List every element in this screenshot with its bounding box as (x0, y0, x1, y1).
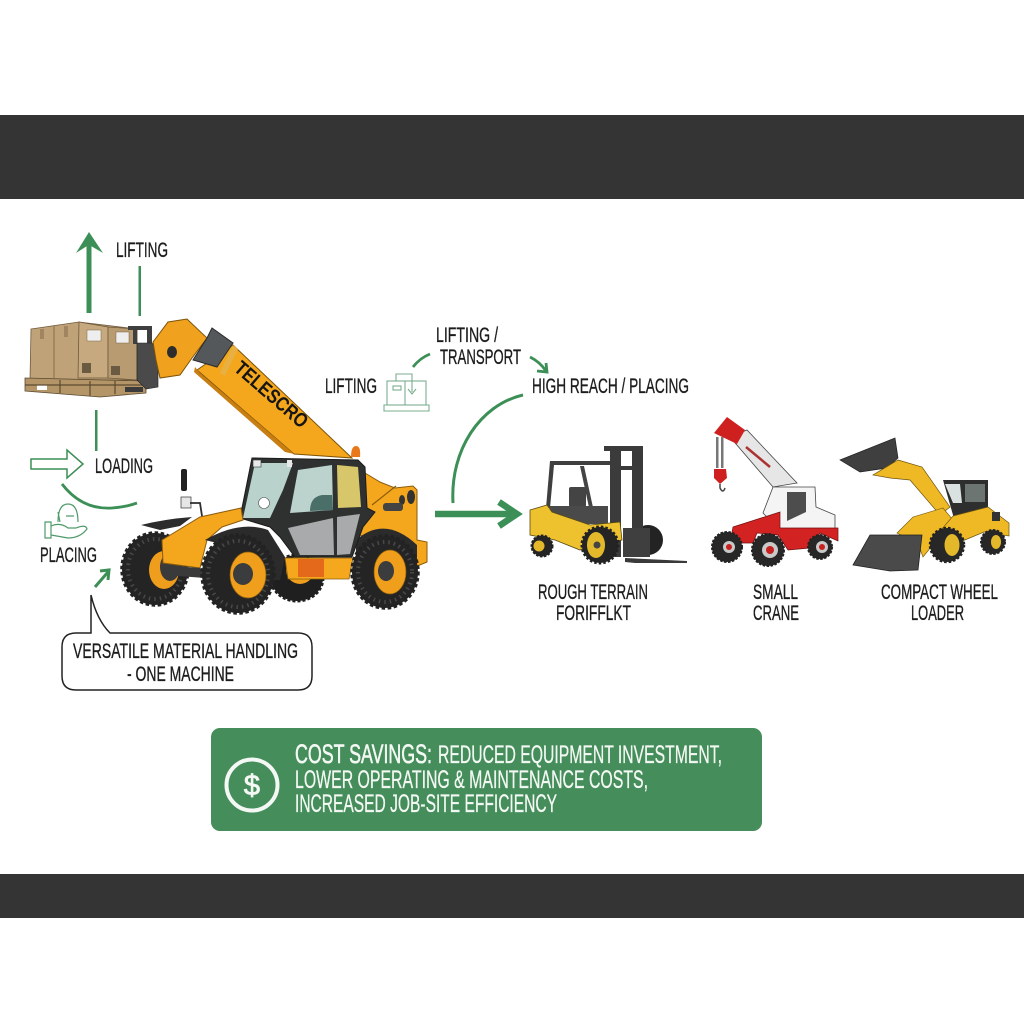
wheel: middle (202, 535, 274, 613)
rear orange body (360, 470, 427, 567)
boom lettering: TELESCRO (230, 357, 312, 433)
telehandler boom (128, 319, 352, 458)
connector: lifting line (138, 266, 141, 316)
label: small crane: SMALL (753, 581, 798, 604)
small crane (712, 417, 838, 566)
banner text (295, 739, 722, 818)
label: lifting: LIFTING (116, 239, 168, 262)
forklift (530, 446, 687, 563)
icon: green up arrow (76, 232, 103, 313)
cab (240, 458, 375, 557)
curved connector (62, 484, 137, 508)
callout: - ONE MACHINE (127, 663, 234, 686)
wheel: hidden rear mid (271, 555, 323, 601)
callout: VERSATILE MATERIAL HANDLING (73, 640, 298, 663)
forks (625, 558, 687, 563)
banner text: REDUCED EQUIPMENT INVESTMENT, (438, 741, 722, 769)
icon: dollar: $ (244, 770, 260, 802)
lower chassis (285, 558, 353, 579)
arc arrow right (530, 357, 547, 372)
icon: load on pallet (384, 374, 429, 411)
compact wheel loader (840, 438, 1009, 571)
panel: cost savings banner (211, 728, 762, 831)
callout (62, 595, 312, 690)
large arc connector (453, 395, 523, 503)
label: rough terrain forklift (538, 581, 648, 625)
label: small crane: CRANE (753, 602, 799, 625)
rear wheel arch (356, 529, 417, 560)
arc arrow left (413, 354, 430, 367)
connector: pallet to loading line (95, 410, 98, 451)
label: compact wheel loader: LOADER (911, 602, 964, 625)
beacon (351, 446, 360, 457)
label: rough terrain forklift: ROUGH TERRAIN (538, 581, 648, 604)
label: loading: LOADING (95, 455, 153, 478)
label: lifting / transport: LIFTING / (436, 324, 498, 347)
wheel: front left (122, 533, 188, 605)
small arrow to machine (95, 570, 109, 587)
label: lifting 2: LIFTING (325, 375, 377, 398)
label: rough terrain forklift: FORIFFLKT (556, 602, 631, 625)
top dark band (0, 115, 1024, 199)
telehandler machine body (122, 446, 427, 613)
icon: hollow arrow (31, 450, 83, 478)
label: lifting / transport (436, 324, 521, 369)
front hood (162, 508, 243, 568)
icon: pallet of cartons (25, 322, 146, 397)
label: small crane (753, 581, 799, 625)
banner text: COST SAVINGS: (295, 739, 432, 769)
label: compact wheel loader (881, 581, 998, 625)
bottom dark band (0, 874, 1024, 918)
middle wheel arch (205, 527, 285, 580)
large arrow (435, 502, 517, 526)
mirror (181, 469, 202, 516)
label: placing: PLACING (40, 544, 97, 567)
banner text: LOWER OPERATING & MAINTENANCE COSTS, (295, 766, 648, 794)
label: lifting / transport: TRANSPORT (440, 346, 521, 369)
label: high reach: HIGH REACH / PLACING (532, 375, 689, 398)
icon: dollar (226, 760, 278, 810)
banner text: INCREASED JOB-SITE EFFICIENCY (295, 790, 557, 818)
icon: hand placing (45, 504, 87, 538)
wheel: rear (352, 536, 418, 608)
